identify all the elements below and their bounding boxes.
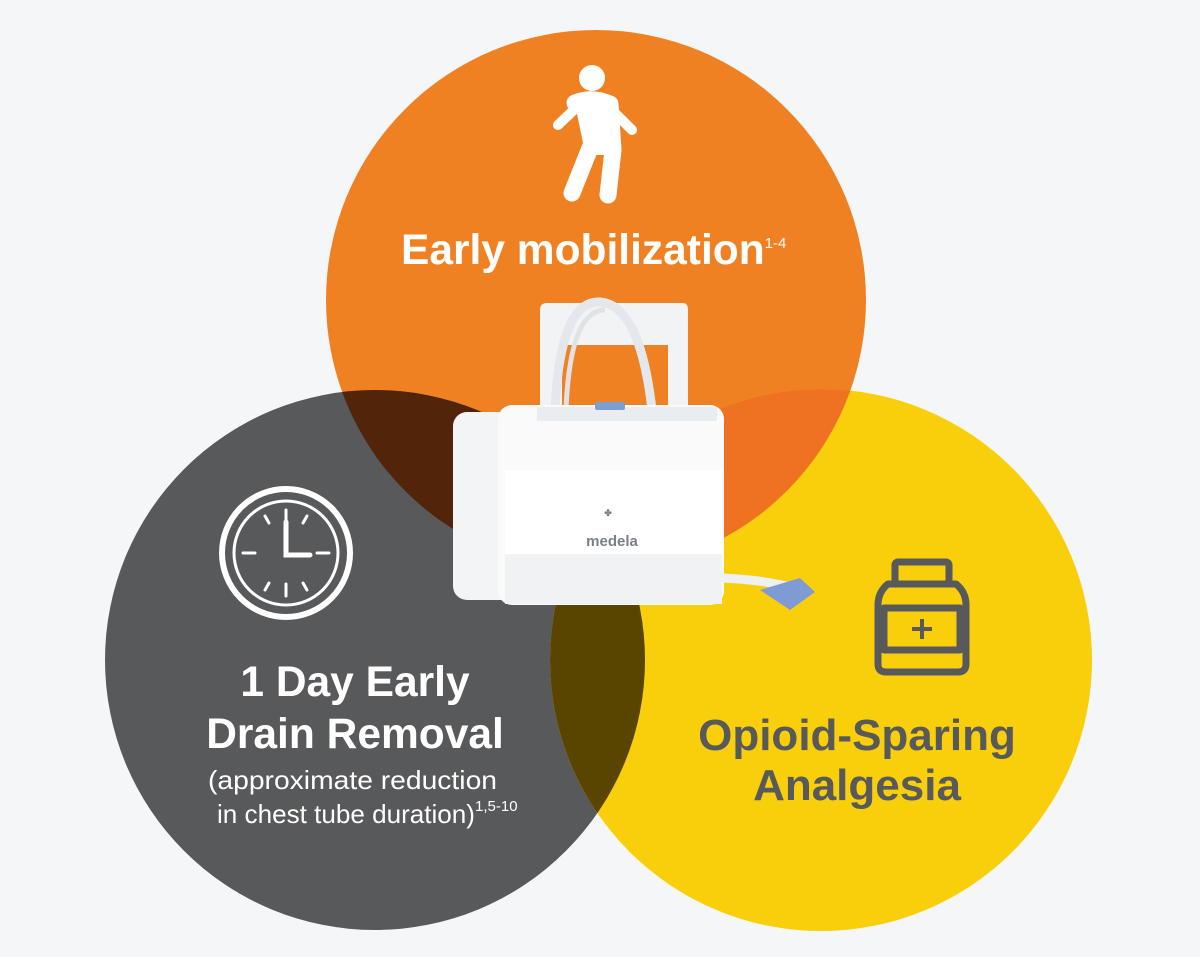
device: medela chest drainage unit: medela [586, 533, 639, 550]
subtext: chest tube duration: 1,5-10 [475, 798, 518, 815]
heading: 1 day early drain removal: Drain Removal [206, 711, 504, 758]
heading: opioid-sparing analgesia: Opioid-Sparing [698, 711, 1016, 760]
icon: medicine jar [878, 562, 966, 672]
icon: walking person [558, 65, 632, 195]
circle: drain removal [105, 390, 645, 930]
overlap: orange and yellow [720, 389, 850, 538]
subtext: chest tube duration: in chest tube duration) [217, 799, 475, 829]
overlap: orange and dark [342, 390, 482, 529]
circle: opioid-sparing [550, 389, 1092, 931]
subtext: chest tube duration [208, 765, 518, 829]
venn circles [105, 30, 1092, 931]
heading: early mobilization: Early mobilization [401, 227, 765, 274]
heading: 1 day early drain removal [206, 659, 504, 758]
circle: early mobilization [326, 30, 866, 570]
subtext: chest tube duration: (approximate reduction [208, 765, 497, 795]
icon: clock [222, 489, 350, 617]
heading: opioid-sparing analgesia: Analgesia [753, 761, 961, 810]
heading: 1 day early drain removal: 1 Day Early [240, 659, 470, 706]
device: medela chest drainage unit [453, 302, 815, 610]
heading: opioid-sparing analgesia [698, 711, 1016, 810]
overlap: dark and yellow [550, 605, 645, 813]
device: medela chest drainage unit: ✤ [604, 508, 612, 518]
heading: early mobilization: 1-4 [765, 235, 786, 252]
